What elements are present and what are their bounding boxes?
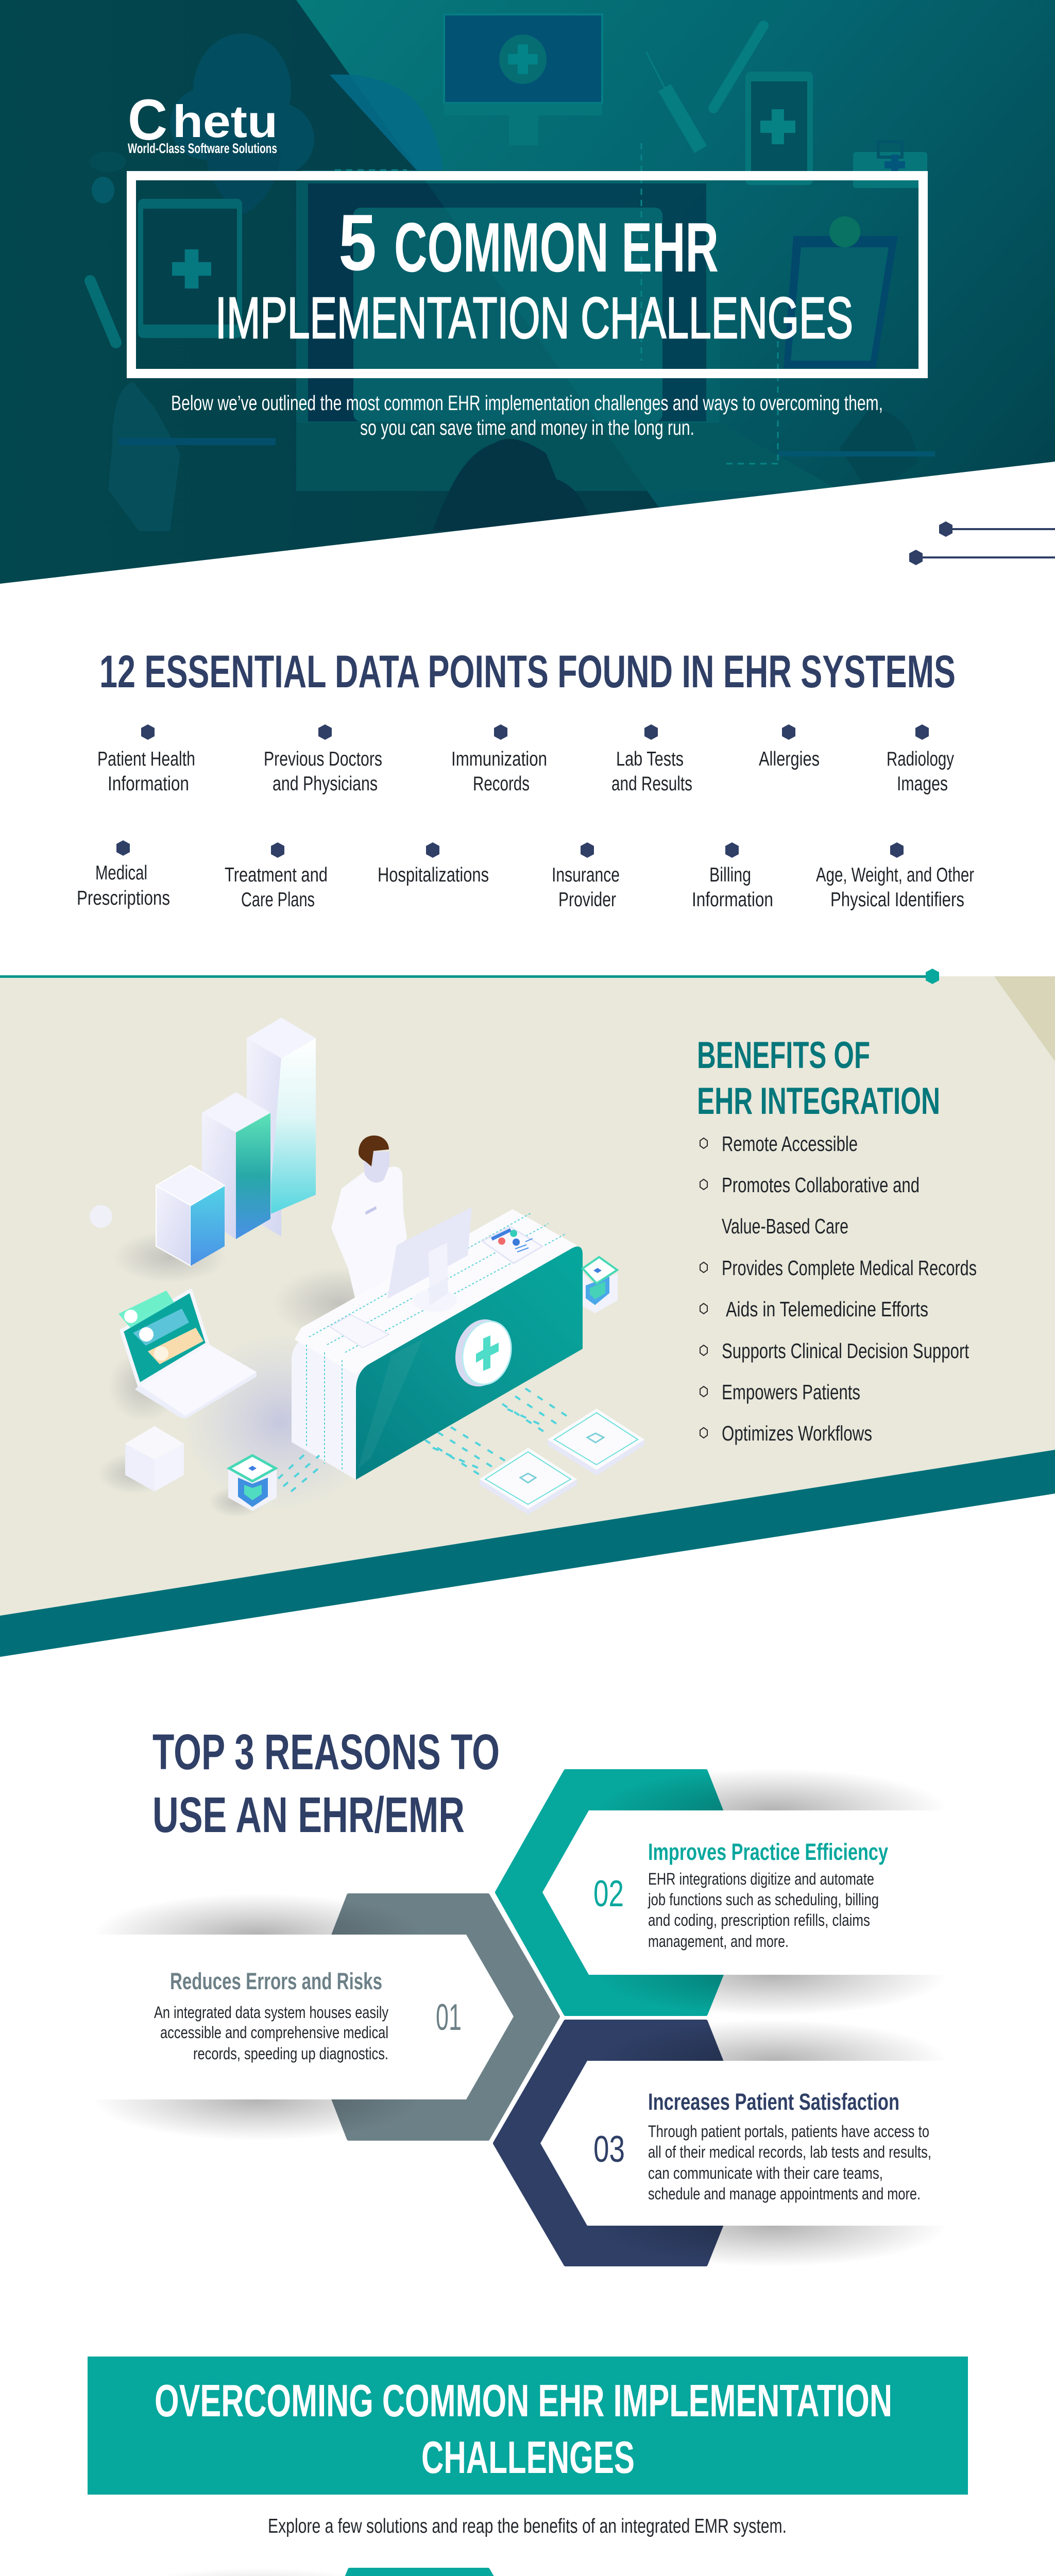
item: insurance provider: Insurance [552, 864, 620, 886]
item: allergies [759, 724, 820, 770]
benefits heading: BENEFITS OF [697, 1035, 870, 1076]
item: immunization records [451, 724, 547, 795]
benefits heading: EHR INTEGRATION [697, 1080, 940, 1122]
panel: overcoming challenges [77, 2357, 979, 2576]
item: radiology images: Radiology [887, 748, 954, 770]
item: age weight identifiers [816, 842, 974, 911]
reason 03: all of their medical records, lab tests and results, [648, 2143, 931, 2161]
reason 02 [497, 1768, 979, 2016]
item: lab tests [611, 724, 692, 795]
item: immunization records: Records [473, 773, 530, 795]
item: empowers patients [700, 1380, 860, 1404]
item: billing information [692, 842, 773, 911]
item: medical prescriptions: Medical [95, 862, 147, 884]
reason 02: and coding, prescription refills, claims [648, 1911, 870, 1929]
logo: Chetu: C [128, 88, 167, 152]
item: hospitalizations: Hospitalizations [378, 864, 489, 886]
cross badge [449, 1314, 518, 1392]
title line 1 [338, 198, 719, 287]
reason 01: Reduces Errors and Risks [170, 1968, 382, 1994]
item: promotes collaborative [700, 1173, 920, 1238]
item: remote accessible [700, 1132, 858, 1156]
benefits list [700, 1132, 977, 1445]
reason 02: EHR integrations digitize and automate [648, 1870, 874, 1888]
item: complete records: Provides Complete Medical Records [722, 1256, 977, 1280]
intro text: so you can save time and money in the long run. [360, 416, 694, 439]
reason 03: Increases Patient Satisfaction [648, 2089, 899, 2115]
reason 03: Through patient portals, patients have access to [648, 2122, 929, 2141]
reason 03: 03 [593, 2129, 625, 2170]
item: age weight identifiers: Physical Identifiers [830, 889, 964, 911]
item: allergies: Allergies [759, 748, 820, 770]
reason 01: 01 [436, 1997, 462, 2038]
panel: benefits beige section [0, 969, 1055, 1657]
laptop [118, 1291, 257, 1419]
reason 03: can communicate with their care teams, [648, 2164, 883, 2182]
item: insurance provider [552, 842, 620, 911]
item: age weight identifiers: Age, Weight, and Other [816, 864, 974, 886]
item: radiology images: Images [897, 773, 948, 795]
reason 02: 02 [593, 1873, 624, 1914]
challenge 01 [77, 2568, 558, 2576]
heading: TOP 3 REASONS TO [152, 1724, 500, 1780]
monitor [387, 1207, 472, 1312]
server box right [583, 1257, 618, 1313]
item: hospitalizations [378, 842, 489, 886]
item: optimizes workflows [700, 1421, 872, 1445]
banner: CHALLENGES [421, 2432, 635, 2483]
reason 02: job functions such as scheduling, billing [648, 1890, 879, 1909]
reason 01: records, speeding up diagnostics. [193, 2044, 388, 2063]
title frame [131, 176, 923, 374]
desk [292, 1209, 583, 1480]
logo: Chetu: hetu [173, 96, 278, 147]
intro text [171, 391, 883, 439]
benefits heading [697, 1035, 940, 1122]
chart bars [156, 1018, 316, 1266]
clipboard on desk [330, 1315, 389, 1348]
item: medical prescriptions [77, 840, 170, 909]
heading: USE AN EHR/EMR [152, 1787, 465, 1843]
reason 03: schedule and manage appointments and more. [648, 2184, 921, 2203]
banner [88, 2357, 968, 2495]
title line 1: COMMON EHR [394, 208, 719, 286]
blank cube [125, 1426, 184, 1492]
server box bottom [228, 1455, 277, 1511]
item: billing information: Billing [709, 864, 751, 886]
panel: header hero [0, 0, 1055, 592]
heading [152, 1724, 500, 1843]
illustration: faint medical background [89, 14, 935, 531]
reason 02: management, and more. [648, 1932, 789, 1951]
item: lab tests: and Results [611, 773, 692, 795]
item: promotes collaborative: Value-Based Care [722, 1214, 848, 1238]
item: treatment and care plans: Care Plans [241, 889, 315, 911]
reason 01 [77, 1893, 558, 2141]
item: promotes collaborative: Promotes Collaborative and [722, 1173, 920, 1197]
item: telemedicine: Aids in Telemedicine Efforts [726, 1297, 928, 1321]
item: lab tests: Lab Tests [616, 748, 684, 770]
panel: 12 essential data points [77, 646, 974, 911]
item: medical prescriptions: Prescriptions [77, 887, 170, 909]
ball [90, 1205, 112, 1228]
item: patient health information: Patient Health [97, 748, 195, 770]
item: previous doctors [264, 724, 382, 795]
item: insurance provider: Provider [558, 889, 616, 911]
item: previous doctors: and Physicians [273, 773, 378, 795]
item: treatment and care plans: Treatment and [225, 864, 328, 886]
panel: top 3 reasons [77, 1724, 979, 2267]
item: remote accessible: Remote Accessible [722, 1132, 858, 1156]
logo: Chetu: World-Class Software Solutions [128, 141, 277, 156]
reason 01: An integrated data system houses easily [154, 2003, 388, 2022]
reason 02: Improves Practice Efficiency [648, 1839, 888, 1865]
item: patient health information: Information [108, 773, 189, 795]
item: optimizes workflows: Optimizes Workflows [722, 1421, 872, 1445]
item: immunization records: Immunization [451, 748, 547, 770]
reason 03 [495, 2020, 979, 2267]
data dashes [278, 1388, 572, 1492]
connector lines: navy [909, 521, 1055, 565]
section divider with marker [0, 969, 939, 984]
reason 01: accessible and comprehensive medical [160, 2023, 388, 2042]
desk card [482, 1227, 542, 1263]
item: patient health information [97, 724, 195, 795]
item: treatment and care plans [225, 842, 328, 911]
item: billing information: Information [692, 889, 773, 911]
diagonal teal band [0, 1450, 1055, 1657]
item: radiology images [887, 724, 954, 795]
item: empowers patients: Empowers Patients [722, 1380, 860, 1404]
doctor [331, 1136, 407, 1298]
title line 1: 5 [338, 198, 377, 287]
logo: Chetu [128, 88, 278, 156]
item: previous doctors: Previous Doctors [264, 748, 382, 770]
charging pads [480, 1409, 644, 1515]
illustration: isometric health desk [90, 1018, 644, 1517]
intro text: Explore a few solutions and reap the benefits of an integrated EMR system. [268, 2515, 787, 2537]
item: clinical decision: Supports Clinical Decision Support [722, 1339, 969, 1363]
